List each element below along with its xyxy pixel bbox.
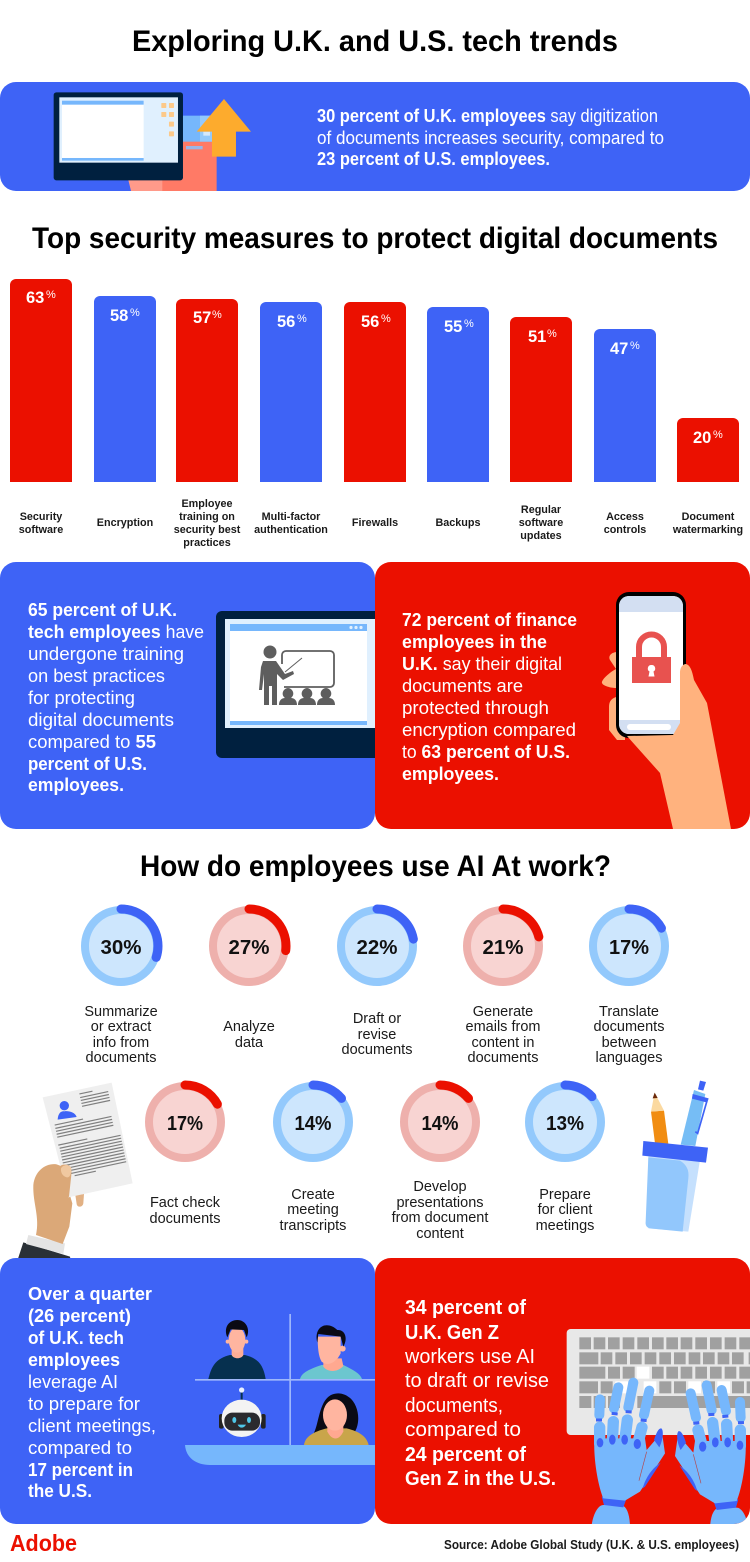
person 2 (300, 1325, 362, 1379)
ring: transcripts 14%: transcripts (280, 1218, 346, 1234)
bar: security software 63%: 63 (26, 289, 44, 307)
bar: multi-factor authentication 56%: 56 (277, 313, 295, 331)
icon: pencil and pen in cup (642, 1081, 709, 1232)
panel text: workers use AI (404, 1346, 535, 1368)
icon: monitor with teacher (216, 611, 375, 758)
panel text: tech employees have (28, 622, 204, 642)
ring: translate 17%: documents (594, 1019, 664, 1035)
ring: generate emails 21%: content in (472, 1035, 534, 1051)
heading: AI at work: How do employees use AI At work? (140, 850, 611, 883)
ring: analyze 27%: data (235, 1035, 264, 1051)
panel text: 24 percent of (405, 1444, 526, 1466)
bar: employee training 57%: practices (183, 537, 231, 549)
bar: regular software updates 51%: software (519, 517, 563, 529)
bar: firewalls 56%: 56 (361, 313, 379, 331)
bar: encryption 58%: Encryption (97, 517, 153, 529)
ring: summarize 30%: or extract (91, 1019, 151, 1035)
ring: summarize 30%: 30% (100, 937, 142, 959)
icon: video meeting with robot (185, 1314, 375, 1465)
bar: firewalls 56%: Firewalls (352, 517, 398, 529)
bar: multi-factor authentication 56%: % (297, 313, 307, 325)
bar: document watermarking 20%: 20 (693, 429, 711, 447)
right robot hand (675, 1385, 748, 1528)
bar: firewalls 56%: % (381, 313, 391, 325)
ring: fact check 17%: 17% (167, 1113, 203, 1135)
banner text: of documents increases security, compared to (317, 127, 664, 148)
ring: translate 17%: 17% (609, 937, 649, 959)
bar: access controls 47%: 47 (610, 340, 628, 358)
ring: draft 22%: documents (342, 1042, 412, 1058)
ring: summarize 30% (84, 909, 158, 1066)
panel: tech employees client meetings (0, 1258, 375, 1524)
panel text: Gen Z in the U.S. (405, 1468, 556, 1490)
ring: summarize 30%: info from (93, 1035, 149, 1051)
bar: employee training 57%: security best (174, 524, 241, 536)
panel text: for protecting (28, 688, 135, 708)
panel text: employees. (28, 775, 124, 795)
panel text: compared to (405, 1419, 521, 1441)
bar: regular software updates 51% (510, 317, 572, 542)
ring: summarize 30%: documents (86, 1050, 156, 1066)
bar: encryption 58%: 58 (110, 307, 128, 325)
panel text: of U.K. tech (28, 1328, 124, 1348)
bar: backups 55%: 55 (444, 318, 462, 336)
bar: backups 55% (427, 307, 489, 529)
panel text (404, 1297, 556, 1490)
panel text: undergone training (28, 644, 184, 664)
bar: regular software updates 51%: % (547, 328, 557, 340)
bar: firewalls 56% (344, 302, 406, 529)
ring: client meetings 13%: for client (538, 1202, 592, 1218)
bar: document watermarking 20%: % (713, 429, 723, 441)
source note: Source: Adobe Global Study (U.K. & U.S. employees) (444, 1538, 739, 1552)
panel text: digital documents (28, 710, 174, 730)
ring: generate emails 21%: Generate (473, 1004, 533, 1020)
panel: U.K. tech employees training (0, 562, 375, 829)
panel text (402, 610, 577, 784)
bar: multi-factor authentication 56%: authentication (254, 524, 328, 536)
panel text: employees in the (402, 632, 547, 652)
ring: translate 17%: Translate (599, 1004, 659, 1020)
ring: presentations 14%: Develop (413, 1179, 467, 1195)
panel text: encryption compared (402, 720, 576, 740)
panel text: leverage AI (28, 1372, 118, 1392)
icon: hand holding resume (18, 1083, 133, 1260)
ring: client meetings 13% (528, 1085, 602, 1234)
bar: employee training 57%: 57 (193, 309, 211, 327)
ring: generate emails 21% (466, 909, 540, 1066)
bar: regular software updates 51%: Regular (521, 504, 562, 516)
bar: security software 63%: Security (20, 511, 62, 523)
bar: access controls 47%: controls (604, 524, 646, 536)
icon: computer with upload arrow (54, 92, 251, 194)
bar: employee training 57%: Employee (181, 498, 233, 510)
bar: access controls 47% (594, 329, 656, 536)
panel text: protected through (402, 698, 549, 718)
panel text: U.K. Gen Z (405, 1322, 499, 1344)
bar: document watermarking 20%: watermarking (672, 524, 743, 536)
panel text: 72 percent of finance (402, 610, 577, 630)
ring: presentations 14% (392, 1085, 488, 1242)
person 3 (304, 1393, 369, 1445)
ring: draft 22%: revise (358, 1027, 396, 1043)
panel text: U.K. say their digital (402, 654, 562, 674)
table (185, 1445, 375, 1465)
panel text: percent of U.S. (28, 754, 147, 774)
ring stats (84, 909, 666, 1242)
bar chart (10, 279, 743, 549)
ring: draft 22%: Draft or (353, 1011, 401, 1027)
Adobe logo: Adobe (10, 1530, 77, 1556)
panel text: (26 percent) (28, 1306, 131, 1326)
ring: translate 17%: between (602, 1035, 656, 1051)
panel text: the U.S. (28, 1481, 92, 1501)
robot (219, 1387, 266, 1437)
banner text (317, 105, 664, 169)
panel text (28, 1284, 156, 1501)
panel text: documents, (405, 1395, 503, 1417)
heading: security measures: Top security measures to protect digital documents (32, 222, 718, 255)
ring: presentations 14%: content (416, 1226, 464, 1242)
panel text: compared to 55 (28, 732, 156, 752)
icon: hand holding phone with lock (602, 592, 731, 829)
panel text: 65 percent of U.K. (28, 600, 177, 620)
left robot hand (592, 1383, 665, 1525)
ring: generate emails 21%: 21% (482, 937, 524, 959)
ring: fact check 17%: documents (150, 1211, 220, 1227)
bar: security software 63% (10, 279, 72, 536)
panel text: employees (28, 1350, 120, 1370)
bar: employee training 57%: % (212, 309, 222, 321)
ring: presentations 14%: presentations (396, 1195, 484, 1211)
ring: generate emails 21%: emails from (466, 1019, 540, 1035)
ring: transcripts 14%: Create (291, 1187, 335, 1203)
panel text: employees. (402, 764, 499, 784)
panel text: client meetings, (28, 1416, 156, 1436)
bar: encryption 58% (94, 296, 156, 529)
ring: presentations 14%: 14% (422, 1113, 459, 1135)
ring: draft 22% (340, 909, 414, 1058)
panel text: 17 percent in (28, 1460, 133, 1480)
bar: access controls 47%: Access (606, 511, 644, 523)
banner text: 30 percent of U.K. employees say digitization (317, 105, 658, 126)
bar: encryption 58%: % (130, 307, 140, 319)
ring: translate 17%: languages (596, 1050, 662, 1066)
panel text: compared to (28, 1438, 132, 1458)
ring: client meetings 13%: 13% (546, 1113, 584, 1135)
ring: client meetings 13%: Prepare (539, 1187, 591, 1203)
bar: regular software updates 51%: updates (520, 530, 562, 542)
ring: client meetings 13%: meetings (536, 1218, 594, 1234)
person 1 (208, 1320, 266, 1379)
panel text: 34 percent of (405, 1297, 526, 1319)
ring: summarize 30%: Summarize (84, 1004, 158, 1020)
bar: regular software updates 51%: 51 (528, 328, 546, 346)
banner text: 23 percent of U.S. employees. (317, 148, 550, 169)
bar: document watermarking 20%: Document (682, 511, 735, 523)
bar: employee training 57% (174, 299, 241, 549)
ring: transcripts 14%: meeting (287, 1202, 339, 1218)
bar: security software 63%: software (19, 524, 63, 536)
ring: fact check 17%: Fact check (150, 1195, 221, 1211)
ring: draft 22%: 22% (356, 937, 398, 959)
bar: multi-factor authentication 56% (254, 302, 328, 536)
icon: robot hands on keyboard (567, 1329, 750, 1528)
bar: multi-factor authentication 56%: Multi-factor (262, 511, 321, 523)
panel text: to draft or revise (405, 1370, 549, 1392)
ring: fact check 17% (148, 1085, 222, 1227)
panel text (28, 600, 204, 795)
ring: analyze 27%: Analyze (223, 1019, 275, 1035)
ring: analyze 27%: 27% (228, 937, 270, 959)
panel text: to 63 percent of U.S. (402, 742, 570, 762)
panel: Gen Z workers (375, 1258, 750, 1528)
panel text: documents are (402, 676, 523, 696)
panel text: on best practices (28, 666, 165, 686)
title: Exploring U.K. and U.S. tech trends (132, 25, 618, 58)
ring: presentations 14%: from document (392, 1210, 488, 1226)
ring: translate 17% (592, 909, 666, 1066)
panel text: to prepare for (28, 1394, 140, 1414)
bar: security software 63%: % (46, 289, 56, 301)
bar: backups 55%: % (464, 318, 474, 330)
bar: backups 55%: Backups (435, 517, 481, 529)
panel text: Over a quarter (28, 1284, 152, 1304)
ring: transcripts 14% (276, 1085, 350, 1234)
panel: digitization banner (0, 82, 750, 194)
bar: employee training 57%: training on (179, 511, 235, 523)
bar: access controls 47%: % (630, 340, 640, 352)
bar: document watermarking 20% (672, 418, 743, 536)
ring: generate emails 21%: documents (468, 1050, 538, 1066)
ring: analyze 27% (212, 909, 286, 1051)
panel: finance employees encryption (375, 562, 750, 829)
ring: transcripts 14%: 14% (294, 1113, 332, 1135)
